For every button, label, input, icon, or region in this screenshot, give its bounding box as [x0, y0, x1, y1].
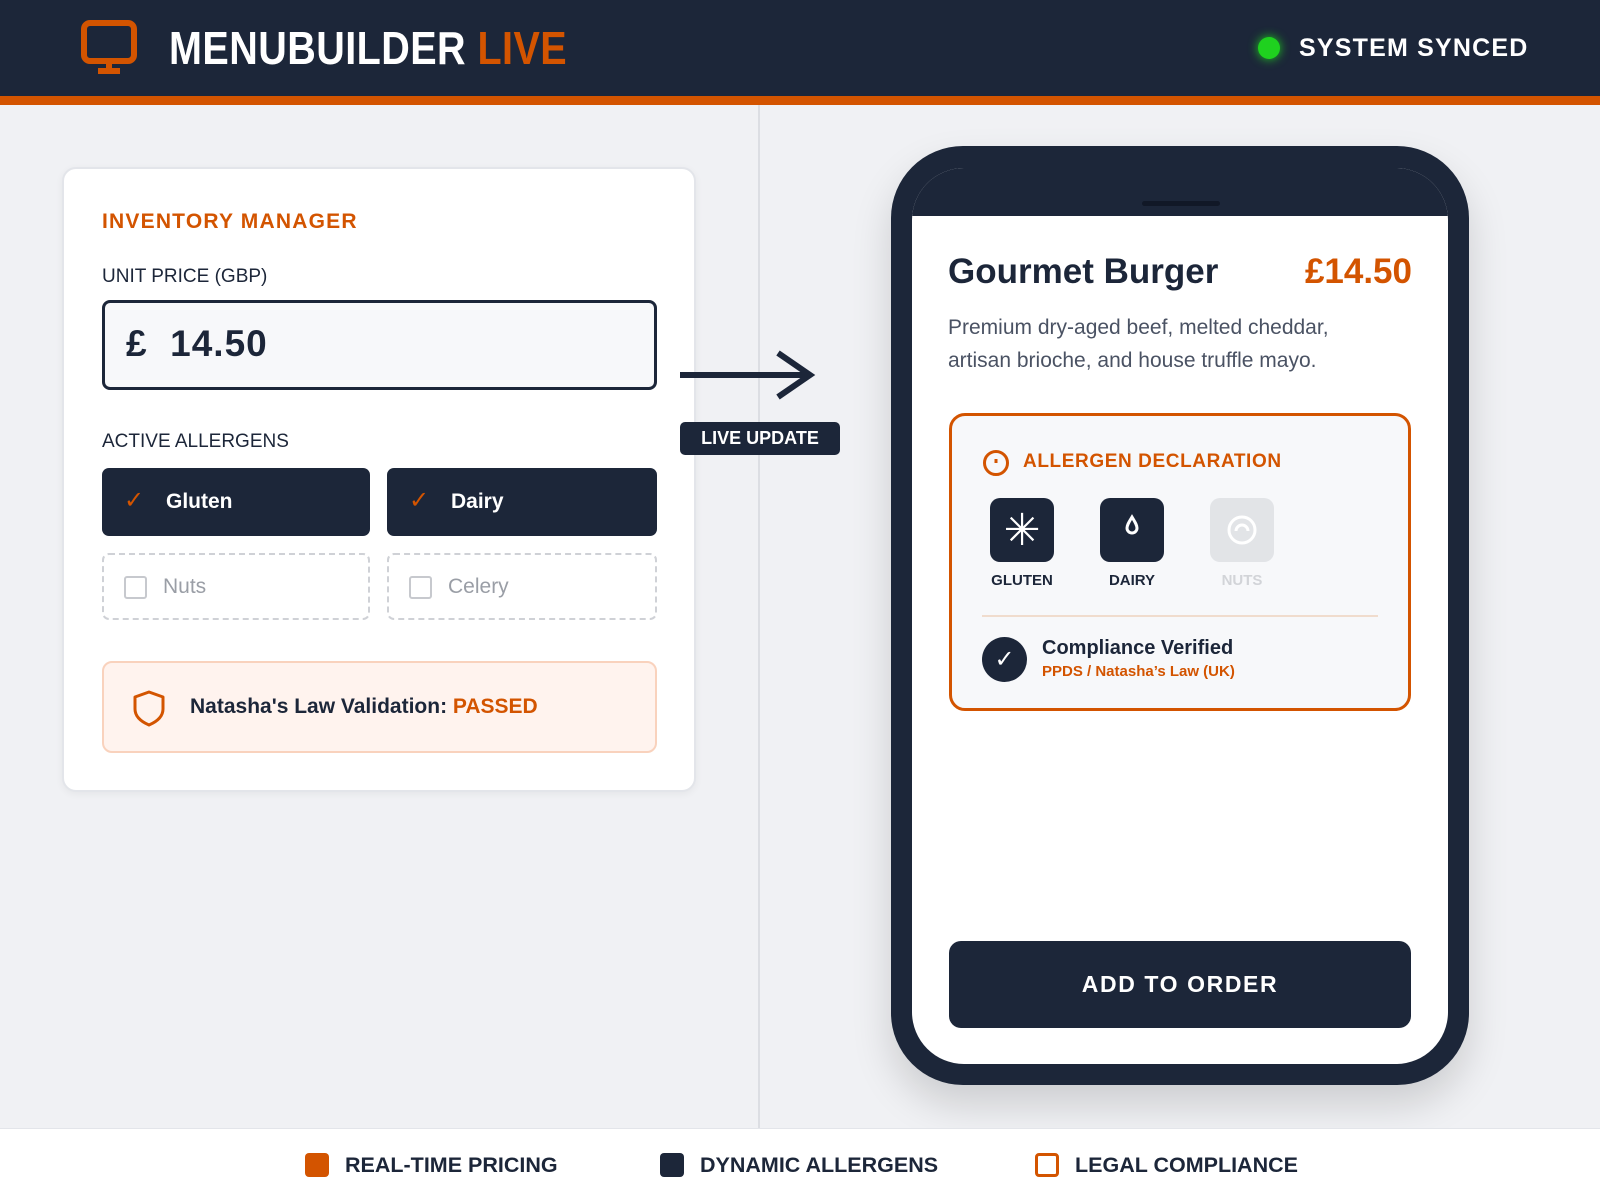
icon: dairy: DAIRY	[1109, 572, 1155, 589]
compliance verified: PPDS / Natasha’s Law (UK)	[1042, 663, 1235, 680]
header bar	[0, 0, 1600, 105]
vertical divider	[758, 105, 760, 1128]
toggle: gluten: Gluten	[166, 490, 232, 513]
toggle: celery	[387, 553, 657, 620]
icon: gluten: GLUTEN	[991, 572, 1053, 589]
phone screen	[912, 168, 1448, 1064]
icon: nuts (inactive): NUTS	[1222, 572, 1262, 589]
compliance verified: ✓	[994, 646, 1015, 673]
status: system synced	[1251, 30, 1529, 66]
toggle: nuts: Nuts	[163, 575, 206, 598]
compliance verified: Compliance Verified	[1042, 637, 1233, 659]
toggle: dairy: ✓	[409, 487, 429, 514]
legend: legal compliance: LEGAL COMPLIANCE	[1075, 1152, 1298, 1176]
button: add to order: ADD TO ORDER	[1082, 971, 1278, 997]
heading: INVENTORY MANAGER	[102, 210, 358, 233]
toggle: gluten: ✓	[124, 487, 144, 514]
product price: £14.50	[1305, 252, 1412, 291]
toggle: celery: Celery	[448, 575, 509, 598]
label: active allergens: ACTIVE ALLERGENS	[102, 431, 289, 452]
legend: real-time pricing: REAL-TIME PRICING	[345, 1152, 558, 1176]
validation banner	[102, 661, 657, 753]
compliance verified	[982, 637, 1235, 682]
notch bar	[912, 168, 1448, 216]
toggle: nuts	[102, 553, 370, 620]
status: system synced: SYSTEM SYNCED	[1299, 34, 1529, 62]
allergen toggles	[102, 468, 657, 620]
price input: £ 14.50	[126, 323, 268, 364]
icon: alert circle	[983, 450, 1009, 476]
heading: ALLERGEN DECLARATION	[1023, 451, 1282, 472]
icon: nuts (inactive)	[1210, 498, 1274, 589]
live update pill	[680, 422, 840, 455]
panel: allergen declaration	[949, 413, 1411, 711]
divider	[982, 615, 1378, 617]
arrow: live update	[680, 350, 840, 455]
icon: dairy	[1100, 498, 1164, 589]
validation banner: Natasha's Law Validation: PASSED	[190, 695, 538, 718]
description: Premium dry-aged beef, melted cheddar, artisan brioche, and house truffle mayo.	[948, 316, 1329, 372]
icon: gluten: ✳	[1004, 506, 1040, 555]
phone mockup	[891, 146, 1469, 1085]
legend: dynamic allergens: DYNAMIC ALLERGENS	[700, 1152, 938, 1176]
footer legend	[0, 1128, 1600, 1200]
live update pill: LIVE UPDATE	[701, 428, 819, 448]
price input	[102, 300, 657, 390]
toggle: dairy	[387, 468, 657, 536]
button: add to order	[949, 941, 1411, 1028]
title: MENUBUILDER LIVE	[169, 22, 567, 74]
label: unit price: UNIT PRICE (GBP)	[102, 266, 267, 287]
product title: Gourmet Burger	[948, 252, 1218, 291]
icon: gluten	[990, 498, 1054, 589]
icon: monitor	[81, 20, 137, 74]
panel: inventory manager	[62, 167, 696, 792]
toggle: gluten	[102, 468, 370, 536]
toggle: dairy: Dairy	[451, 490, 504, 513]
icon: shield	[134, 690, 164, 726]
